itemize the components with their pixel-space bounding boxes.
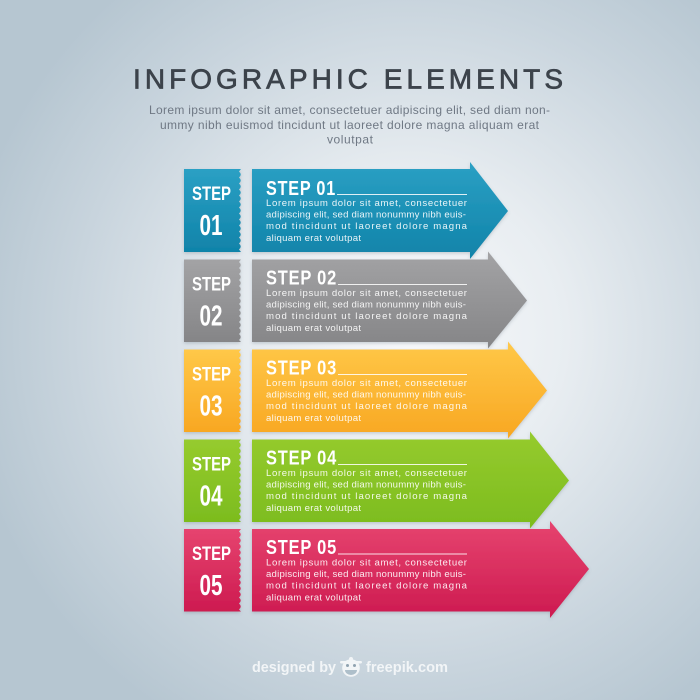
step 02 arrow: aliquam erat volutpat <box>266 323 361 334</box>
step 03 arrow: Lorem ipsum dolor sit amet, consectetuer <box>266 378 468 389</box>
step 01 arrow: aliquam erat volutpat <box>266 233 361 244</box>
step 03 row <box>184 342 547 438</box>
icon: freepik mascot <box>340 657 362 677</box>
step 01 arrow: STEP 01 <box>266 177 336 200</box>
step 03 arrow: adipiscing elit, sed diam nonummy nibh euis- <box>266 390 466 400</box>
step 01 arrow: mod tincidunt ut laoreet dolore magna <box>266 221 468 232</box>
step 04 tab <box>184 440 241 522</box>
step 01 arrow: Lorem ipsum dolor sit amet, consectetuer <box>266 198 468 209</box>
step 05 row <box>184 521 589 618</box>
step 05 tab <box>184 529 241 612</box>
step 02 row <box>184 252 527 348</box>
step 03 tab: 03 <box>200 390 222 422</box>
step 04 tab: 04 <box>200 480 222 512</box>
step 03 arrow: aliquam erat volutpat <box>266 413 361 424</box>
footer credit <box>252 657 448 677</box>
step 04 arrow: adipiscing elit, sed diam nonummy nibh euis- <box>266 480 466 490</box>
step 01 tab <box>184 169 241 252</box>
step 04 row <box>184 432 569 528</box>
step 05 tab: STEP <box>192 544 231 565</box>
step 05 tab: 05 <box>200 570 222 602</box>
step 02 tab <box>184 260 241 342</box>
step 01 tab: STEP <box>192 184 231 205</box>
step 02 arrow: adipiscing elit, sed diam nonummy nibh euis- <box>266 300 466 310</box>
step 02 arrow: Lorem ipsum dolor sit amet, consectetuer <box>266 288 468 299</box>
step 02 arrow: mod tincidunt ut laoreet dolore magna <box>266 311 468 322</box>
step 04 arrow: aliquam erat volutpat <box>266 503 361 514</box>
step 03 tab: STEP <box>192 364 231 386</box>
footer credit: freepik.com <box>366 660 448 676</box>
title: INFOGRAPHIC ELEMENTS <box>133 64 563 94</box>
step 04 arrow: mod tincidunt ut laoreet dolore magna <box>266 491 468 502</box>
step 05 arrow: adipiscing elit, sed diam nonummy nibh euis- <box>266 569 466 580</box>
step 01 row <box>184 162 508 259</box>
step 05 arrow: aliquam erat volutpat <box>266 592 361 604</box>
footer credit: designed by <box>252 660 336 676</box>
step 05 arrow: mod tincidunt ut laoreet dolore magna <box>266 580 468 592</box>
step 02 tab: STEP <box>192 274 231 296</box>
step 05 arrow: STEP 05 <box>266 536 337 559</box>
subtitle text block <box>149 103 550 146</box>
step 03 tab <box>184 350 241 432</box>
step 03 arrow: STEP 03 <box>266 356 337 380</box>
step 02 arrow <box>252 252 527 348</box>
step 02 tab: 02 <box>200 300 222 332</box>
step 04 arrow <box>252 432 569 528</box>
step 05 arrow <box>252 521 589 618</box>
subtitle text block: volutpat <box>327 132 374 146</box>
step 03 arrow <box>252 342 547 438</box>
step 05 arrow: Lorem ipsum dolor sit amet, consectetuer <box>266 558 468 568</box>
step 01 arrow <box>252 162 508 259</box>
subtitle text block: ummy nibh euismod tincidunt ut laoreet dolore magna aliquam erat <box>160 118 540 132</box>
subtitle text block: Lorem ipsum dolor sit amet, consectetuer adipiscing elit, sed diam non- <box>149 103 550 117</box>
step 04 tab: STEP <box>192 454 231 476</box>
step 02 arrow: STEP 02 <box>266 266 337 290</box>
step 04 arrow: Lorem ipsum dolor sit amet, consectetuer <box>266 468 468 479</box>
step 03 arrow: mod tincidunt ut laoreet dolore magna <box>266 401 468 412</box>
step 04 arrow: STEP 04 <box>266 446 337 470</box>
step 01 arrow: adipiscing elit, sed diam nonummy nibh euis- <box>266 210 466 220</box>
step 01 tab: 01 <box>200 210 222 242</box>
